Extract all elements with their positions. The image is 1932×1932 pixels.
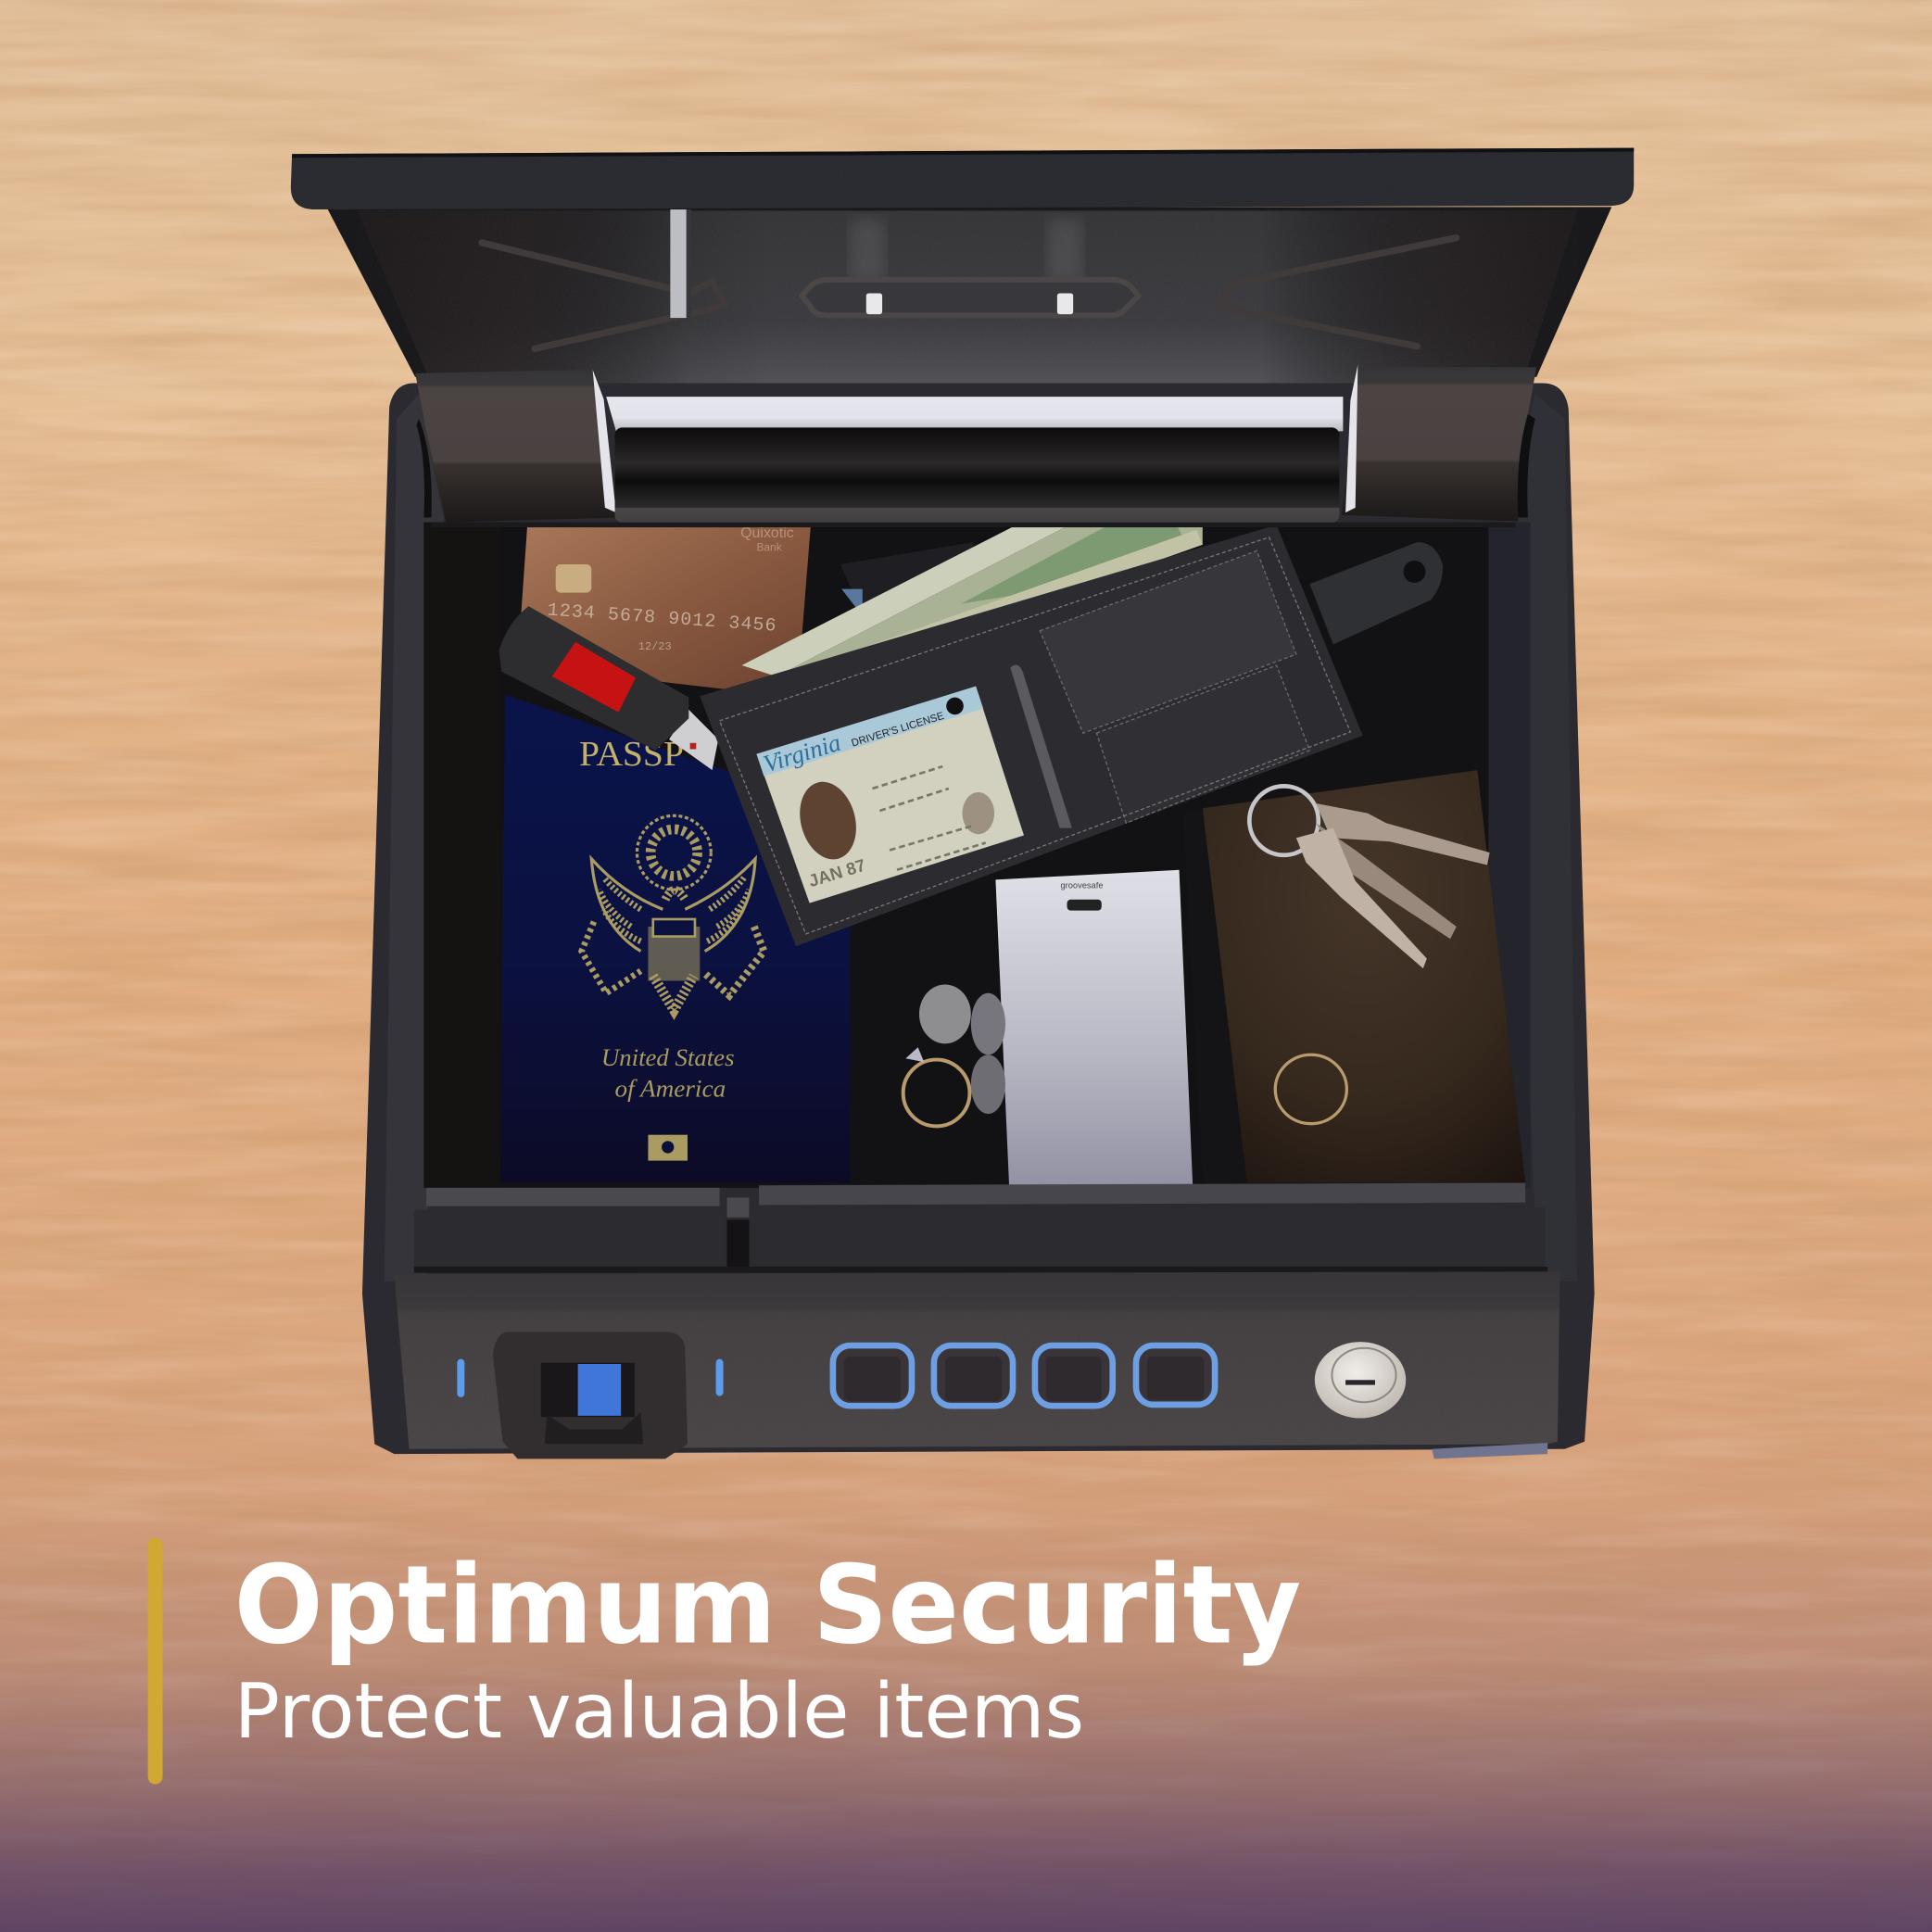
heading text: Optimum Security: [234, 1542, 1301, 1669]
hinge light edges: [593, 370, 616, 512]
passport: of America: [615, 1074, 726, 1102]
coins: [919, 984, 1005, 1114]
white tag: [995, 870, 1193, 1185]
credit card: Bank: [756, 540, 782, 553]
subheading text: Protect valuable items: [234, 1667, 1084, 1756]
light streaks on lid: [851, 220, 885, 281]
hinge pivots: [416, 419, 432, 517]
passport: PASSP: [579, 735, 684, 774]
right LED: [716, 1359, 724, 1396]
keypad button 2: [934, 1345, 1013, 1406]
pen: [1183, 811, 1247, 1183]
lid pins: [866, 293, 882, 314]
hinge and roller: [415, 365, 1536, 527]
lid front edge: [291, 148, 1634, 209]
credit card: 12/23: [638, 640, 672, 653]
white light strip: [606, 397, 1343, 431]
keypad button 4: [1136, 1345, 1215, 1405]
interior tray: [423, 523, 1528, 1188]
center handle recess: [802, 280, 1139, 315]
cash: [741, 524, 1203, 691]
safe lid: [291, 148, 1634, 397]
lid outer sides: [326, 207, 1611, 377]
left hinge block: [415, 370, 619, 523]
wallet: [700, 524, 1443, 946]
lid interior: [358, 210, 1577, 397]
wallet strap: [1309, 542, 1443, 644]
white tag: groovesafe: [1060, 881, 1103, 890]
left bracket slot: [482, 243, 726, 348]
keys: [1249, 786, 1490, 968]
driver's license: Virginia: [760, 728, 844, 777]
safe body: [362, 384, 1595, 1454]
fingerprint scanner: [493, 1332, 688, 1458]
passport: United States: [601, 1043, 735, 1071]
body shell: [362, 384, 1595, 1454]
dark pouch behind cash: [840, 542, 973, 613]
credit card: Quixotic: [740, 525, 794, 541]
metal latch: [670, 209, 688, 318]
eagle emblem: [582, 815, 764, 1010]
keypad button 1: [833, 1345, 912, 1406]
notebook: [1203, 770, 1525, 1183]
right hinge block: [1342, 367, 1536, 521]
left LED: [457, 1359, 464, 1397]
wallet pockets: [1040, 550, 1296, 733]
passport: [500, 695, 851, 1183]
foot: [1432, 1443, 1547, 1458]
ring with diamond: [903, 1047, 969, 1126]
credit card: 1234 5678 9012 3456: [547, 600, 777, 637]
tray front lip: [426, 1188, 720, 1206]
control panel: [395, 1271, 1559, 1458]
driver's license: JAN 87: [806, 855, 867, 890]
accent bar: [148, 1537, 163, 1784]
gold band on notebook: [1275, 1054, 1346, 1124]
USB drive: [499, 606, 718, 770]
credit card: [517, 524, 811, 692]
driver's license: [756, 687, 1024, 903]
keypad button 3: [1035, 1345, 1113, 1406]
roller bar: [615, 427, 1339, 523]
driver's license: DRIVER'S LICENSE: [851, 711, 946, 750]
right bracket slot: [1219, 238, 1457, 347]
key lock: [1315, 1342, 1406, 1419]
